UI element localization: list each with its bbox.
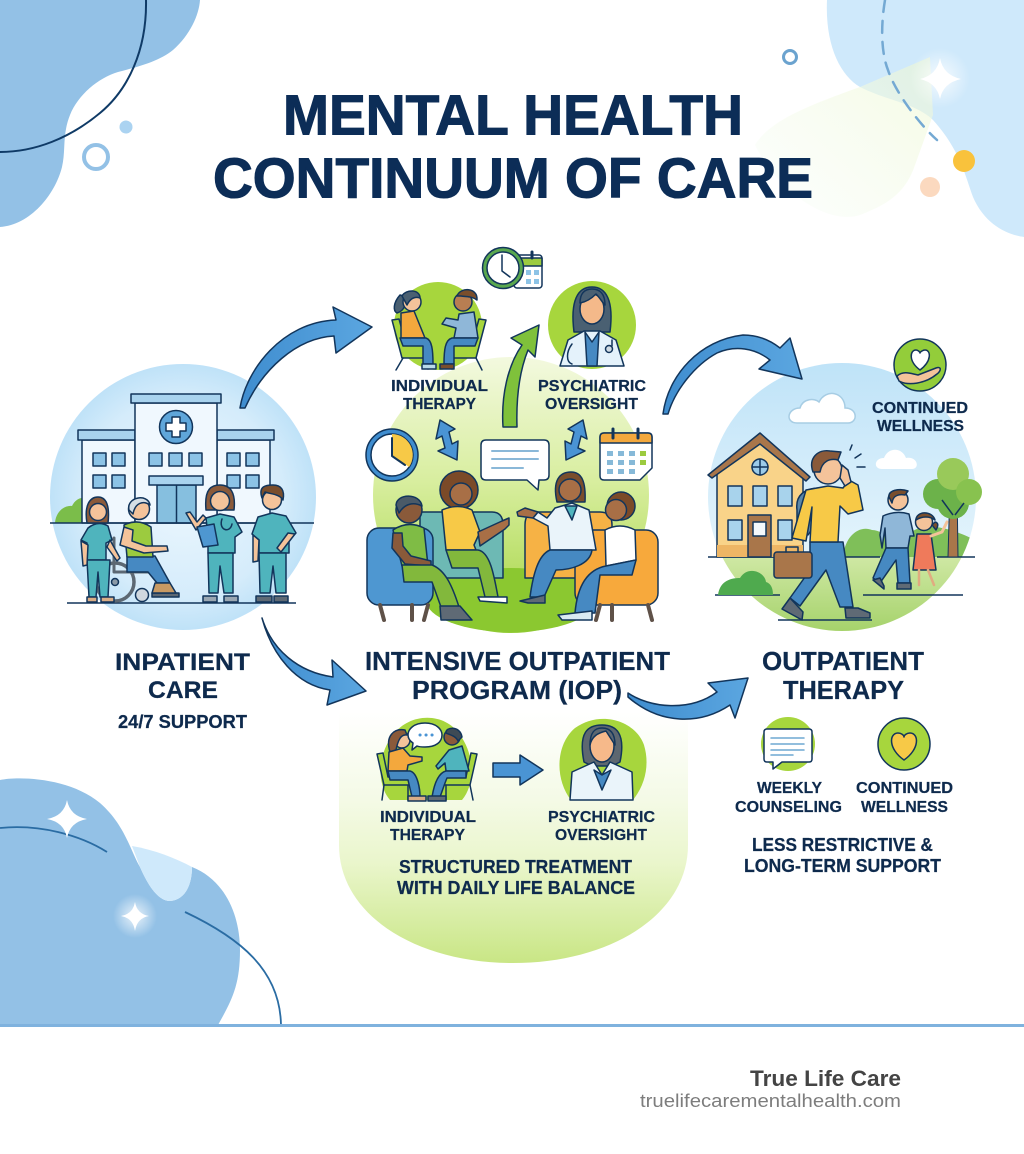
text: outpatient therapy heading: OUTPATIENT (762, 648, 924, 676)
icon: individual therapy session (392, 282, 486, 370)
footer brand: True Life Care (750, 1066, 901, 1091)
icon: bush (55, 498, 82, 523)
text: less restrictive: LESS RESTRICTIVE & (752, 835, 933, 855)
icon: continued wellness heart (878, 718, 930, 770)
text: individual therapy: INDIVIDUAL (380, 809, 476, 826)
text: continued wellness: CONTINUED (872, 400, 968, 417)
decorative blob: top right (755, 0, 1024, 237)
title: CONTINUUM OF CARE (213, 146, 813, 210)
title: MENTAL HEALTH (283, 84, 743, 148)
arrow: IOP to outpatient therapy (628, 678, 748, 719)
icon: right sofas (525, 512, 658, 620)
person: standing girl (81, 497, 120, 602)
text: weekly counseling (735, 780, 842, 816)
text: psychiatric oversight: PSYCHIATRIC (548, 809, 655, 826)
decorative blob: top left (0, 0, 200, 227)
text: structured treatment: STRUCTURED TREATMENT (399, 857, 632, 877)
footer rule (0, 1024, 1024, 1027)
text: continued wellness: WELLNESS (877, 418, 964, 435)
text: psychiatric oversight: PSYCHIATRIC (538, 378, 646, 395)
text: weekly counseling: COUNSELING (735, 799, 842, 816)
text: less restrictive: LONG-TERM SUPPORT (744, 856, 941, 876)
text: psychiatric oversight: OVERSIGHT (555, 827, 647, 844)
text: less restrictive (744, 835, 941, 876)
icon: weekly counseling (761, 717, 815, 771)
person: patient in wheelchair (96, 498, 179, 602)
text: structured treatment: WITH DAILY LIFE BALANCE (397, 878, 635, 898)
text: individual therapy: THERAPY (390, 827, 465, 844)
icon: left sofas (367, 512, 503, 620)
text: individual therapy: INDIVIDUAL (391, 378, 488, 395)
arrow: left double-headed (436, 420, 458, 460)
text: inpatient care heading: INPATIENT (115, 649, 250, 676)
text: inpatient care heading: CARE (148, 677, 218, 704)
panel: IOP details (339, 712, 688, 963)
person: man in green shirt (392, 496, 472, 620)
person: child waving (913, 513, 947, 585)
text: continued wellness: WELLNESS (861, 799, 948, 816)
text: individual therapy (391, 378, 488, 413)
text: IOP heading (365, 646, 670, 705)
arrow: therapy to oversight (493, 755, 543, 785)
text: outpatient therapy heading: THERAPY (783, 677, 904, 705)
text: IOP heading: INTENSIVE OUTPATIENT (365, 646, 670, 676)
text: weekly counseling: WEEKLY (757, 780, 822, 797)
person: counselor in white coat (517, 472, 596, 603)
icon: clock and calendar (482, 248, 542, 288)
text: individual therapy (380, 809, 476, 844)
panel: outpatient illustration (708, 339, 982, 633)
icon: tree (923, 458, 982, 557)
text: continued wellness (856, 780, 953, 816)
person: boy in white shirt (558, 492, 636, 620)
arrow: right double-headed (565, 420, 587, 460)
icon: individual therapy with dialogue (377, 718, 477, 801)
text: continued wellness (872, 400, 968, 435)
panel: inpatient illustration (50, 364, 316, 630)
text: psychiatric oversight (538, 378, 646, 413)
decorative blob: bottom left (0, 778, 281, 1025)
panel: IOP central illustration (366, 248, 658, 633)
person: nurse with clipboard (186, 485, 242, 602)
arrow: inpatient to IOP (262, 618, 366, 705)
text: structured treatment (397, 857, 635, 898)
text: inpatient care heading (115, 649, 250, 704)
text: continued wellness: CONTINUED (856, 780, 953, 797)
footer brand (640, 1066, 901, 1111)
icon: large clock (366, 429, 418, 481)
text: psychiatric oversight (548, 809, 655, 844)
text: individual therapy: THERAPY (403, 396, 476, 413)
person: woman in yellow shirt (440, 471, 509, 603)
text: IOP heading: PROGRAM (IOP) (412, 675, 622, 705)
arrow: inpatient to individual therapy (240, 307, 372, 408)
person: walking man on phone (774, 445, 870, 620)
icon: hospital building (78, 394, 274, 523)
icon: psychiatrist (559, 719, 647, 800)
icon: clouds (789, 393, 917, 469)
icon: psychiatric doctor (548, 281, 636, 369)
person: male nurse (252, 485, 296, 602)
icon: house (708, 433, 810, 557)
arrow: green upward (503, 325, 539, 427)
icon: speech bubble (481, 440, 549, 490)
title (213, 84, 813, 210)
text: 24/7 support: 24/7 SUPPORT (118, 712, 247, 732)
icon: hand with heart (894, 339, 946, 391)
person: father walking (873, 490, 914, 589)
text: psychiatric oversight: OVERSIGHT (545, 396, 638, 413)
arrow: IOP to outpatient illustration (663, 335, 802, 414)
text: outpatient therapy heading (762, 648, 924, 705)
footer brand: truelifecarementalhealth.com (640, 1090, 901, 1111)
icon: large calendar (600, 429, 652, 480)
icon: bush (718, 571, 773, 595)
